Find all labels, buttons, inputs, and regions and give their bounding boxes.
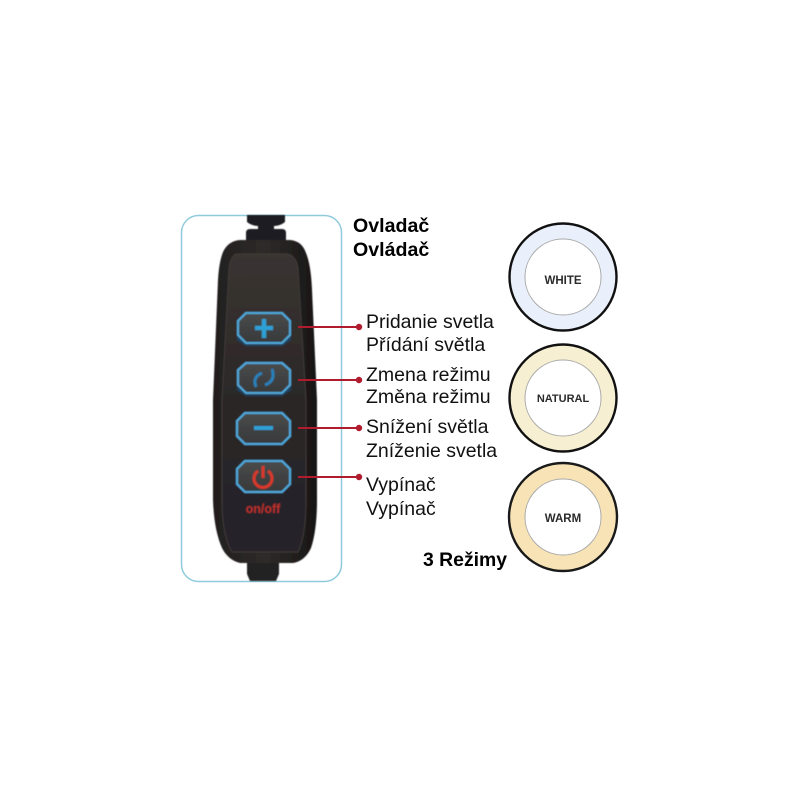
ring: warm: WARM <box>545 513 581 525</box>
on/off label: on/off <box>246 502 281 516</box>
label: switch: Vypínač <box>366 474 436 496</box>
label: change mode: Změna režimu <box>366 386 491 408</box>
label: reduce light: Zníženie svetla <box>366 440 497 462</box>
label: switch: Vypínač <box>366 498 436 520</box>
heading: controller: Ovladač <box>353 215 429 237</box>
button: power <box>237 461 290 492</box>
heading: controller <box>353 215 429 261</box>
ring: white <box>510 224 616 330</box>
label: change mode: Zmena režimu <box>366 364 491 386</box>
heading: 3 modes: 3 Režimy <box>423 549 507 571</box>
ring: white: WHITE <box>544 275 582 287</box>
icon: minus <box>254 426 273 430</box>
top connector <box>246 215 286 242</box>
icon: power <box>254 466 272 487</box>
body inset outline <box>222 254 306 552</box>
bottom cable <box>247 558 279 581</box>
icon: mode cycle <box>255 369 273 387</box>
label: add light: Pridanie svetla <box>366 311 494 333</box>
label: change mode <box>366 364 491 408</box>
leader lines <box>298 324 362 480</box>
button: mode <box>237 363 291 396</box>
label: add light: Přídání světla <box>366 334 485 356</box>
label: reduce light: Snížení světla <box>366 416 489 438</box>
ring: warm <box>509 463 617 571</box>
ring: natural: NATURAL <box>537 393 589 405</box>
controller device <box>213 215 317 581</box>
label: switch <box>366 474 436 520</box>
label: add light <box>366 311 494 356</box>
button: plus <box>237 313 291 346</box>
button: minus <box>237 413 290 444</box>
label: reduce light <box>366 416 497 462</box>
icon: plus <box>255 319 273 338</box>
panel: controller frame <box>182 216 342 582</box>
heading: controller: Ovládač <box>353 239 429 261</box>
controller body <box>213 240 317 563</box>
ring: natural <box>510 344 616 452</box>
